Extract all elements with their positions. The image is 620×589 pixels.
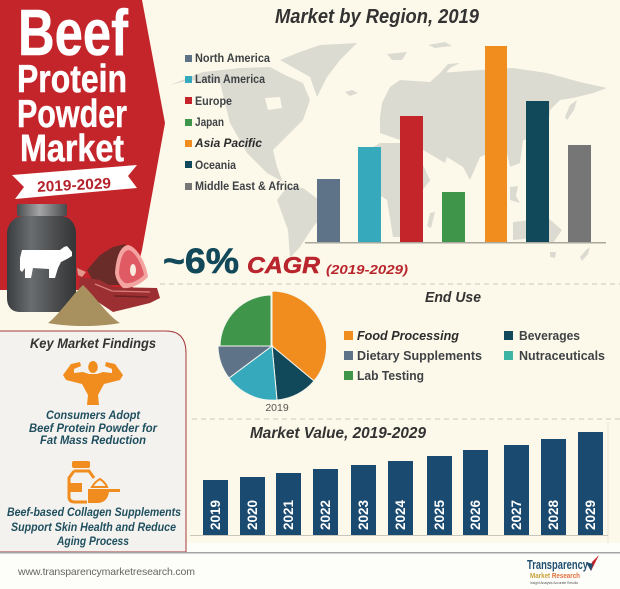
title: Beef Protein Powder Market: Powder bbox=[17, 93, 127, 136]
bar chart: market by region bbox=[305, 46, 606, 244]
bar chart: market value: 2023 bbox=[356, 500, 371, 530]
callout: CAGR bbox=[163, 242, 408, 281]
bar chart: market value: 2022 bbox=[318, 500, 333, 530]
heading: Market Value: Market Value, 2019-2029 bbox=[250, 425, 426, 442]
legend: regions bbox=[185, 53, 300, 193]
bar chart: market value: 2021 bbox=[281, 500, 296, 530]
logo: Transparency Market Research: Transparency bbox=[527, 557, 589, 572]
heading: End Use: End Use bbox=[425, 289, 481, 306]
text: finding two bbox=[7, 505, 181, 548]
text: finding one: Fat Mass Reduction bbox=[40, 433, 146, 447]
title: Beef Protein Powder Market: Protein bbox=[17, 58, 127, 101]
bar chart: market value: 2027 bbox=[509, 500, 524, 530]
icon: protein jar bbox=[7, 204, 76, 312]
callout: CAGR: ~6% bbox=[163, 242, 239, 281]
heading: Key Market Findings: Key Market Findings bbox=[30, 335, 156, 351]
text: finding two: Aging Process bbox=[56, 534, 129, 548]
world map background bbox=[170, 42, 607, 261]
logo: Transparency Market Research: Insight Analysis Accurate Results bbox=[530, 581, 578, 585]
bar chart: market value: 2026 bbox=[468, 500, 483, 530]
legend: regions: Japan bbox=[195, 117, 224, 129]
text: finding one: Beef Protein Powder for bbox=[29, 421, 158, 435]
ribbon: 2019-2029 bbox=[12, 165, 137, 199]
logo: Transparency Market Research bbox=[527, 555, 599, 585]
bar chart: market value bbox=[190, 432, 608, 536]
icon: supplement jar and scoop bbox=[69, 461, 120, 503]
heading: Market by Region: Market by Region, 2019 bbox=[275, 6, 480, 28]
legend: regions: Middle East & Africa bbox=[195, 181, 300, 193]
ribbon: 2019-2029: 2019-2029 bbox=[37, 175, 111, 196]
logo: Transparency Market Research: Market Research bbox=[530, 571, 580, 580]
illustration: jar, powder and meat bbox=[7, 204, 160, 326]
footer: website url: www.transparencymarketresearch.com bbox=[17, 566, 195, 578]
legend: end use: Lab Testing bbox=[357, 368, 424, 383]
legend: regions: Asia Pacific bbox=[194, 138, 263, 150]
legend: regions: Latin America bbox=[195, 74, 266, 86]
text: finding two: Beef-based Collagen Supplements bbox=[7, 505, 181, 519]
bar chart: market value: 2029 bbox=[583, 500, 598, 530]
legend: regions: Europe bbox=[195, 96, 232, 108]
icon: cow silhouette bbox=[20, 246, 72, 278]
legend: end use: Food Processing bbox=[357, 328, 459, 343]
callout: CAGR: (2019-2029) bbox=[326, 262, 408, 277]
legend: regions: Oceania bbox=[195, 160, 237, 172]
panel: key market findings bbox=[0, 331, 186, 552]
panel: title banner bbox=[0, 0, 165, 290]
pie year label: 2019 bbox=[265, 402, 289, 414]
legend: end use bbox=[344, 328, 605, 383]
bar chart: market value: 2024 bbox=[393, 500, 408, 530]
legend: end use: Dietary Supplements bbox=[357, 348, 482, 363]
legend: regions: North America bbox=[195, 53, 271, 65]
bar chart: market value: 2020 bbox=[245, 500, 260, 530]
icon: meat bbox=[77, 244, 160, 312]
text: finding two: Support Skin Health and Reduce bbox=[11, 520, 176, 534]
callout: CAGR: CAGR bbox=[247, 252, 320, 278]
text: finding one bbox=[29, 408, 158, 447]
title: Beef Protein Powder Market: Market bbox=[20, 128, 124, 170]
icon: powder pile bbox=[48, 285, 120, 326]
text: finding one: Consumers Adopt bbox=[46, 408, 141, 422]
bar chart: market value: 2028 bbox=[546, 500, 561, 530]
legend: end use: Beverages bbox=[519, 328, 580, 343]
icon: muscle man bbox=[63, 361, 123, 405]
title: Beef Protein Powder Market bbox=[17, 0, 128, 170]
pie chart: end use bbox=[218, 291, 327, 400]
bar chart: market value: 2019 bbox=[208, 500, 223, 530]
legend: end use: Nutraceuticals bbox=[519, 348, 605, 363]
bar chart: market value: 2025 bbox=[432, 500, 447, 530]
